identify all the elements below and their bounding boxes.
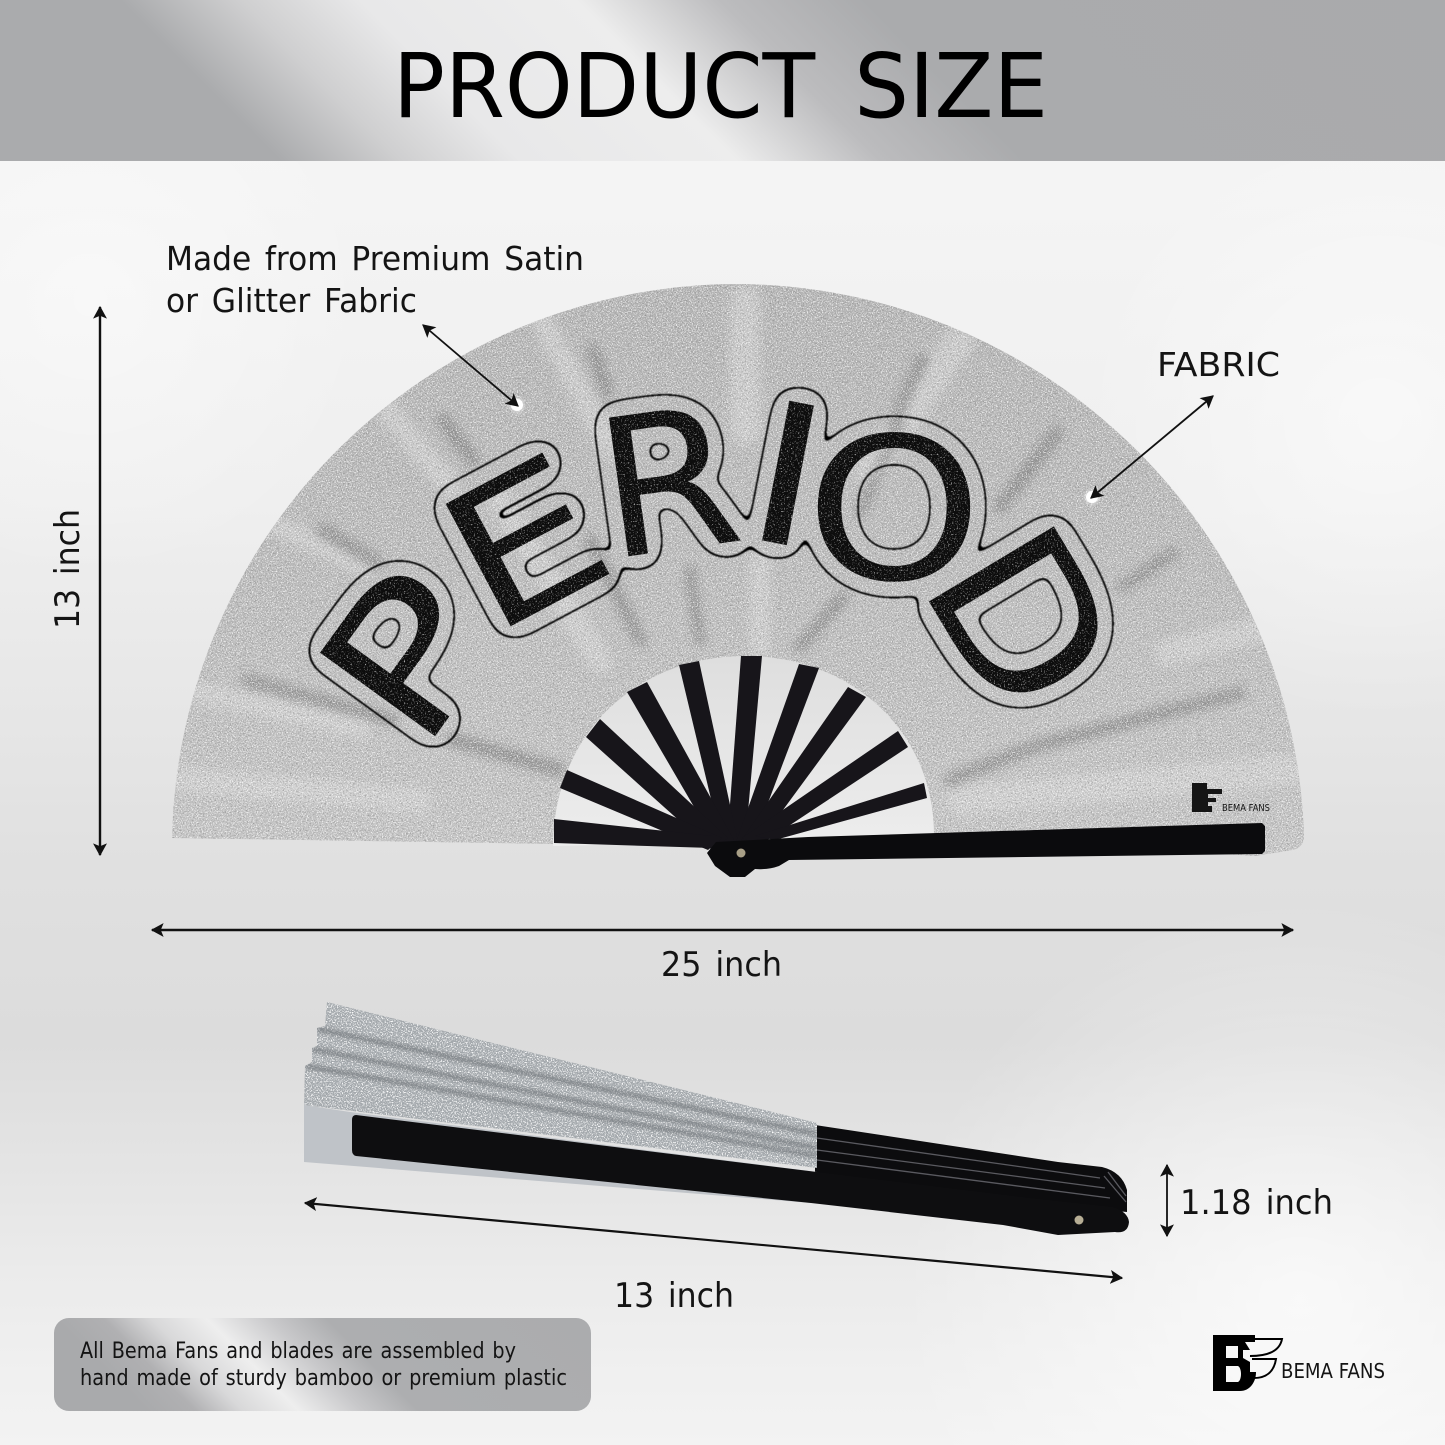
label: 25 inch width: 25 inch <box>661 945 782 985</box>
rear sticks <box>815 1125 1127 1212</box>
note text: hand made of sturdy bamboo or premium plastic <box>80 1366 567 1391</box>
arrow: fan height <box>99 307 101 855</box>
logo wordmark: BEMA FANS <box>1281 1359 1385 1383</box>
label: 1.18 inch: 1.18 inch <box>1180 1183 1333 1223</box>
arrow: closed thickness <box>1166 1165 1168 1236</box>
period lettering: P <box>275 530 546 783</box>
brand logo <box>1213 1335 1385 1391</box>
small logo on fan <box>1192 783 1270 814</box>
period lettering: O <box>805 396 983 627</box>
label: 13 inch height: 13 inch <box>48 509 88 629</box>
small logo on fan: BEMA FANS <box>1222 803 1270 814</box>
pivot pin <box>736 848 746 858</box>
note text: All Bema Fans and blades are assembled by <box>80 1339 516 1364</box>
fan sticks <box>554 656 927 850</box>
arrow: material callout <box>423 325 527 415</box>
logo mark <box>1213 1335 1282 1391</box>
label: fabric material: or Glitter Fabric <box>166 281 417 320</box>
label: fabric material: Made from Premium Satin <box>166 239 584 278</box>
label: fabric material <box>166 239 584 320</box>
arrow: closed length <box>305 1203 1122 1278</box>
glitter pleats <box>304 1002 817 1168</box>
period lettering <box>275 359 1164 783</box>
header band <box>0 0 1445 161</box>
fan fabric <box>160 280 1320 870</box>
fabric fold shading <box>247 350 1240 780</box>
period lettering: D <box>877 487 1164 753</box>
label: fabric: FABRIC <box>1157 345 1280 384</box>
period lettering: R <box>584 364 753 605</box>
period lettering: E <box>407 411 644 677</box>
front stick <box>352 1115 1129 1235</box>
fabric light bands <box>180 300 1290 800</box>
note text <box>80 1339 567 1391</box>
rivet <box>1074 1216 1084 1224</box>
title: PRODUCT SIZE <box>393 34 1048 138</box>
label: 13 inch length: 13 inch <box>614 1276 734 1316</box>
fan hub opening <box>553 656 936 846</box>
note panel <box>54 1318 591 1411</box>
arrow: fabric callout <box>1082 396 1213 507</box>
open fan <box>160 280 1320 877</box>
light panel <box>304 1105 817 1203</box>
stick highlights <box>817 1138 1126 1202</box>
closed fan <box>295 995 1129 1235</box>
period lettering: I <box>729 359 846 596</box>
fan handle <box>707 823 1265 877</box>
arrow: fan width <box>152 929 1293 931</box>
